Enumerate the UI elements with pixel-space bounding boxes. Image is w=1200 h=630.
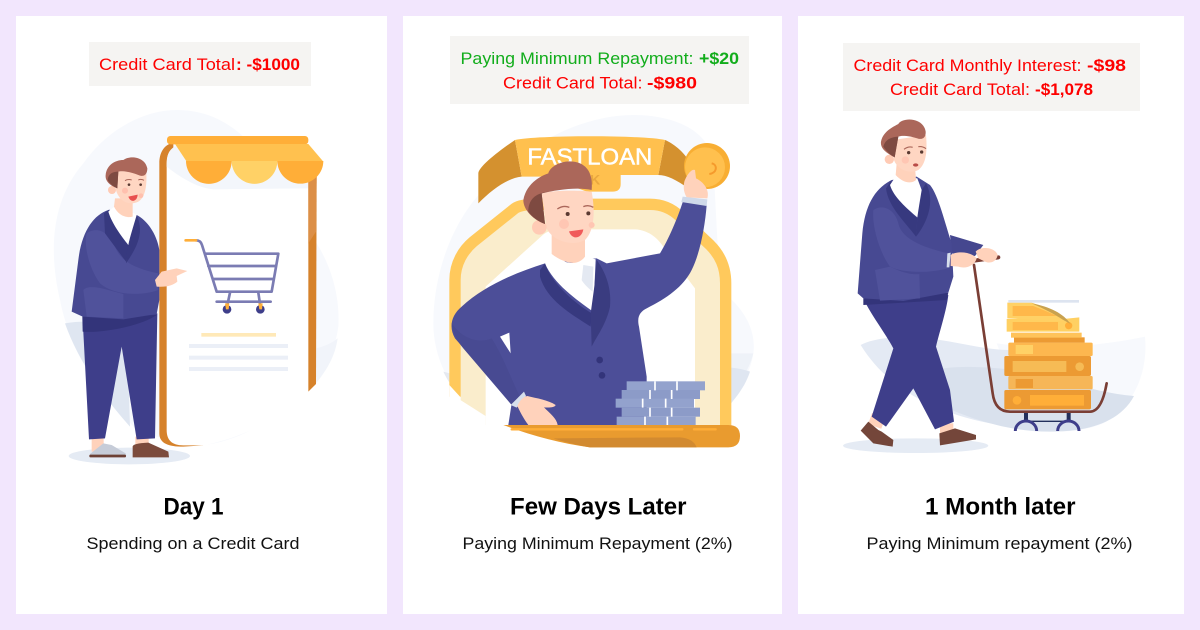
callout: interest and total: Credit Card Total: [890,81,1030,99]
callout: interest and total [843,43,1140,111]
callout: repayment and total: -$980 [647,74,697,92]
icon: stacks of cash [616,381,705,425]
text: spending on a credit card: Spending on a Credit Card [86,535,300,553]
bank banner: BANK [560,172,600,188]
heading: one month later: 1 Month later [925,494,1076,520]
icon: gold coin [684,143,730,189]
callout: interest and total: -$98 [1087,57,1126,75]
heading: day 1: Day 1 [164,494,224,520]
bank banner: FASTLOAN [527,144,652,170]
illustration: man pointing at shop phone with cart [54,110,339,464]
icon: shopping cart [186,240,278,314]
illustration: worried man pushing cart of books [843,119,1145,453]
panel: few days later [403,16,782,614]
man in suit [452,161,707,425]
bank counter [503,425,740,447]
man in suit [72,157,187,457]
shirt cuff [681,197,707,206]
text: paying minimum repayment: Paying Minimum repayment (2%) [866,535,1132,553]
callout: credit card total [89,42,311,86]
shop phone [159,136,323,447]
panel: day 1 [16,16,387,614]
heading: few days later: Few Days Later [510,494,686,520]
raised hand [684,170,708,198]
callout: interest and total: -$1,078 [1035,81,1093,99]
callout: repayment and total [450,36,749,104]
callout: credit card total: Credit Card Total [99,56,235,74]
bank arch [449,204,726,425]
text: paying minimum repayment: Paying Minimum Repayment (2%) [462,535,732,553]
callout: repayment and total: +$20 [699,50,739,68]
panel: one month later [798,16,1184,614]
stack of books [1004,300,1093,409]
callout: repayment and total: Paying Minimum Repayment: [460,50,694,68]
callout: repayment and total: Credit Card Total: [503,74,642,92]
man in suit [858,119,998,447]
callout: interest and total: Credit Card Monthly Interest: [854,57,1082,75]
bank banner [478,136,688,203]
callout: credit card total: : -$1000 [236,56,300,74]
illustration: man at fastloan bank holding coin [433,115,754,447]
trolley [974,257,1107,431]
